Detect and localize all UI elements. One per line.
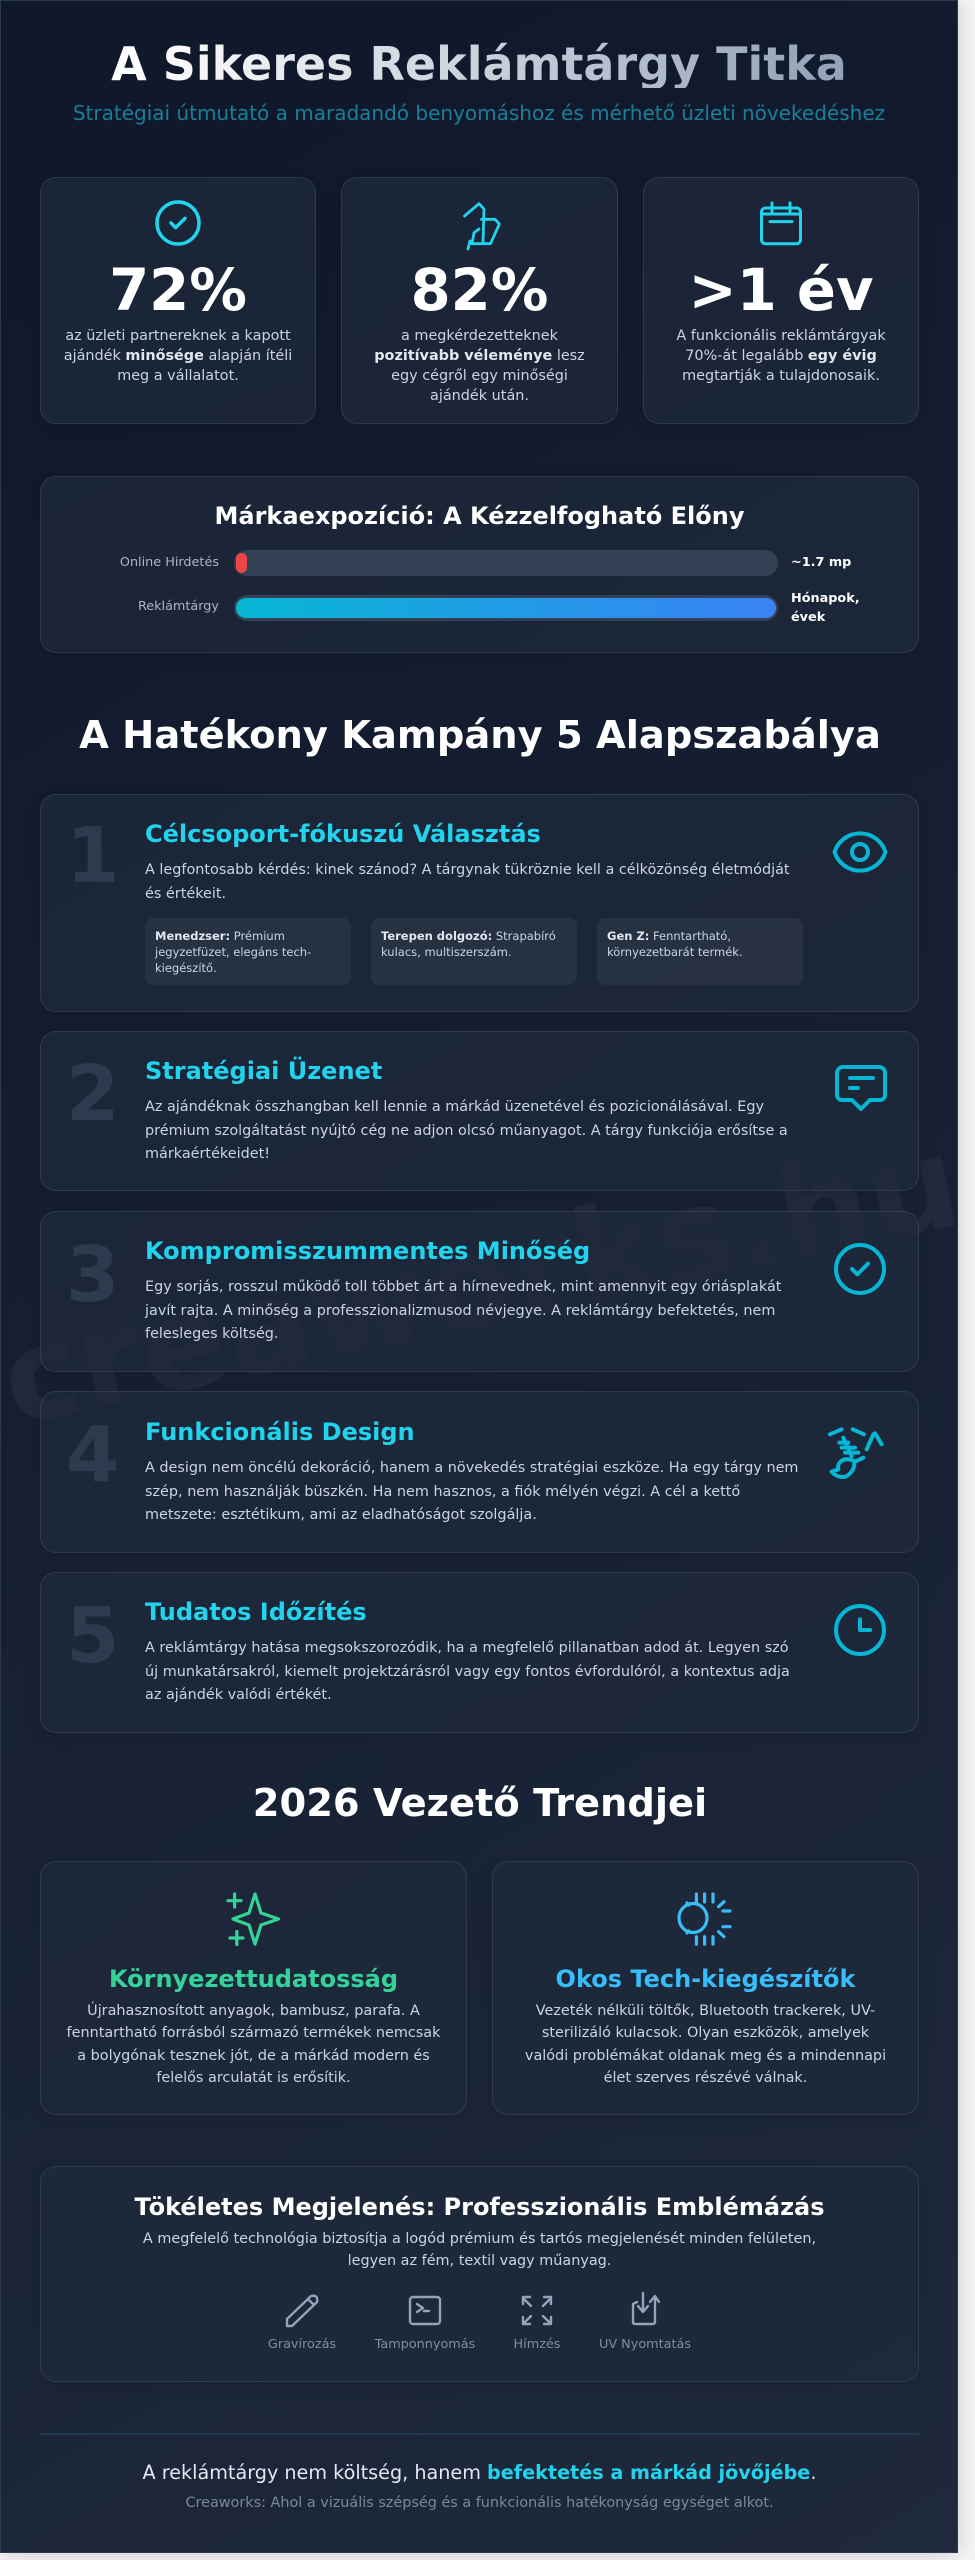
value promo item: Hónapok, bbox=[791, 591, 860, 606]
panel: stat 82% bbox=[341, 177, 618, 424]
audience: field worker: kulacs, multiszerszám. bbox=[381, 945, 512, 959]
audience: manager: kiegészítő. bbox=[155, 961, 217, 975]
bar: promo item bbox=[234, 595, 778, 621]
stat text: pozitívabb véleménye lesz bbox=[374, 348, 585, 364]
tech text: sterilizáló kulacsok. Olyan eszközök, amelyek bbox=[542, 2025, 869, 2041]
rule 1 title: Célcsoport-fókuszú Választás bbox=[145, 820, 541, 848]
rule 4 text bbox=[145, 1460, 798, 1523]
value online ad: ~1.7 mp bbox=[791, 555, 851, 570]
title: A Sikeres Reklámtárgy Titka bbox=[111, 37, 847, 91]
rule 1 text: A legfontosabb kérdés: kinek szánod? A tárgynak tükröznie kell a célközönség életmódját bbox=[145, 862, 790, 878]
label embroidery: Hímzés bbox=[514, 2337, 560, 2352]
label online ad: Online Hirdetés bbox=[120, 555, 219, 570]
rule number 3: 3 bbox=[66, 1231, 119, 1320]
icon: check circle bbox=[155, 200, 201, 246]
audience: field worker bbox=[371, 918, 577, 985]
rule 5 title: Tudatos Időzítés bbox=[145, 1598, 367, 1626]
panel: rule 2 bbox=[40, 1031, 919, 1191]
audience: gen z: Gen Z: Fenntartható, bbox=[607, 929, 731, 943]
panel: brand exposure bbox=[40, 476, 919, 652]
panel: rule 5 bbox=[40, 1572, 919, 1733]
rule number 4: 4 bbox=[66, 1411, 119, 1500]
rule 3 text: Egy sorjás, rosszul működő toll többet árt a hírnevednek, mint amennyit egy óriásplakát bbox=[145, 1279, 781, 1295]
rule 2 text: márkaértékeidet! bbox=[145, 1146, 270, 1162]
stat text: ajándék minősége alapján ítéli bbox=[64, 348, 292, 364]
stat text bbox=[374, 328, 585, 404]
value promo item: évek bbox=[791, 610, 825, 625]
audience: manager: Menedzser: Prémium bbox=[155, 929, 285, 943]
stat text: megtartják a tulajdonosaik. bbox=[682, 368, 880, 384]
panel: rule 1 bbox=[40, 794, 919, 1012]
tech text bbox=[525, 2003, 886, 2086]
rule 5 text: az ajándék valódi értékét. bbox=[145, 1687, 332, 1703]
rule 2 text: prémium szolgáltatást nyújtó cég ne adjon olcsó műanyagot. A tárgy funkciója erősítse a bbox=[145, 1122, 788, 1138]
tech text: élet szerves részévé válnak. bbox=[604, 2070, 807, 2086]
stat text bbox=[676, 328, 886, 384]
stat text: 70%-át legalább egy évig bbox=[685, 348, 877, 364]
icon: sparkles bbox=[226, 1892, 280, 1946]
branding text: A megfelelő technológia biztosítja a logód prémium és tartós megjelenését minden felületen, bbox=[143, 2231, 816, 2247]
eco title: Környezettudatosság bbox=[109, 1965, 398, 1993]
exposure heading: Márkaexpozíció: A Kézzelfogható Előny bbox=[215, 502, 744, 530]
panel: tech trend bbox=[492, 1861, 919, 2115]
rule 4 text: szép, nem használják büszkén. Ha nem hasznos, a fiók mélyén végzi. A cél a kettő bbox=[145, 1484, 740, 1500]
panel: eco trend bbox=[40, 1861, 467, 2115]
stat text bbox=[64, 328, 292, 384]
icon: calendar bbox=[760, 202, 802, 246]
eco text bbox=[66, 2002, 440, 2086]
rule 2 text: Az ajándéknak összhangban kell lennie a márkád üzenetével és pozicionálásával. Egy bbox=[145, 1099, 764, 1115]
stat text: egy cégről egy minőségi bbox=[391, 368, 568, 384]
panel: stat 72% bbox=[40, 177, 316, 424]
icon: eye bbox=[832, 831, 888, 873]
stat number 1 year: >1 év bbox=[688, 257, 874, 324]
footer main: A reklámtárgy nem költség, hanem befektetés a márkád jövőjébe. bbox=[143, 2461, 816, 2484]
rule 3 text: felesleges költség. bbox=[145, 1326, 279, 1342]
branding heading: Tökéletes Megjelenés: Professzionális Emblémázás bbox=[134, 2193, 825, 2221]
rule number 1: 1 bbox=[66, 812, 119, 901]
audience: manager: jegyzetfüzet, elegáns tech- bbox=[155, 945, 311, 959]
rule 5 text bbox=[145, 1640, 790, 1703]
stat text: A funkcionális reklámtárgyak bbox=[676, 328, 886, 344]
stat number 82%: 82% bbox=[411, 257, 548, 324]
branding text: legyen az fém, textil vagy műanyag. bbox=[348, 2253, 611, 2269]
icon: clock bbox=[834, 1604, 886, 1656]
rule 5 text: A reklámtárgy hatása megsokszorozódik, ha a megfelelő pillanatban adod át. Legyen szó bbox=[145, 1640, 789, 1656]
label engraving: Gravírozás bbox=[268, 2337, 336, 2352]
footer divider bbox=[40, 2433, 919, 2434]
audience: gen z: környezetbarát termék. bbox=[607, 945, 743, 959]
eco text: Újrahasznosított anyagok, bambusz, parafa. A bbox=[87, 2003, 420, 2019]
label pad printing: Tamponnyomás bbox=[375, 2337, 475, 2352]
rule 2 text bbox=[145, 1099, 788, 1162]
rule 3 text: javít rajta. A minőség a professzionalizmusod névjegye. A reklámtárgy befektetés, nem bbox=[145, 1302, 775, 1318]
panel: branding bbox=[40, 2166, 919, 2382]
heading: 5 rules: A Hatékony Kampány 5 Alapszabálya bbox=[79, 713, 881, 758]
rule 4 title: Funkcionális Design bbox=[145, 1418, 415, 1446]
audience: field worker: Terepen dolgozó: Strapabíró bbox=[381, 929, 556, 943]
eco text: fenntartható forrásból származó termékek nemcsak bbox=[67, 2025, 440, 2041]
watermark: creaworks.hu bbox=[0, 1107, 958, 1456]
icon: thumb up bbox=[463, 202, 501, 250]
rule 4 text: A design nem öncélú dekoráció, hanem a növekedés stratégiai eszköze. Ha egy tárgy nem bbox=[145, 1460, 798, 1476]
stat text: a megkérdezetteknek bbox=[401, 328, 558, 344]
rule 4 text: metszete: esztétikum, ami az eladhatóságot szolgálja. bbox=[145, 1507, 537, 1523]
rule number 5: 5 bbox=[66, 1592, 119, 1681]
branding text bbox=[143, 2231, 816, 2269]
icon: magic brush bbox=[828, 1427, 884, 1479]
stat number 72%: 72% bbox=[109, 257, 247, 324]
stat text: az üzleti partnereknek a kapott bbox=[65, 328, 291, 344]
icon: chip sun bbox=[677, 1892, 732, 1946]
panel: rule 3 bbox=[40, 1210, 919, 1372]
eco text: a bolygónak tesznek jót, de a márkád modern és bbox=[77, 2048, 430, 2064]
label promo item: Reklámtárgy bbox=[138, 599, 219, 614]
tech title: Okos Tech-kiegészítők bbox=[556, 1965, 855, 1993]
rule 2 title: Stratégiai Üzenet bbox=[145, 1057, 382, 1085]
rule 1 text bbox=[145, 862, 790, 902]
rule 1 text: és értékeit. bbox=[145, 886, 226, 902]
rule number 2: 2 bbox=[66, 1050, 119, 1139]
panel: rule 4 bbox=[40, 1391, 919, 1552]
icon: chat bbox=[835, 1065, 887, 1112]
tech text: Vezeték nélküli töltők, Bluetooth trackerek, UV- bbox=[536, 2003, 875, 2019]
icon: check circle bbox=[834, 1243, 886, 1295]
panel: stat 1 year bbox=[643, 177, 919, 424]
audience: manager bbox=[145, 918, 351, 985]
value promo item bbox=[791, 591, 860, 625]
footer sub: Creaworks: Ahol a vizuális szépség és a funkcionális hatékonyság egységet alkot. bbox=[185, 2495, 774, 2511]
rule 3 title: Kompromisszummentes Minőség bbox=[145, 1237, 590, 1265]
bar: online ad bbox=[234, 550, 778, 576]
stat text: meg a vállalatot. bbox=[117, 368, 239, 384]
tech text: valódi problémákat oldanak meg és a mindennapi bbox=[525, 2048, 886, 2064]
label uv print: UV Nyomtatás bbox=[599, 2337, 691, 2352]
rule 5 text: új munkatársakról, kiemelt projektzárásról vagy egy fontos évfordulóról, a kontextus adja bbox=[145, 1664, 790, 1680]
heading: trends: 2026 Vezető Trendjei bbox=[253, 1781, 707, 1826]
audience: gen z bbox=[597, 918, 803, 985]
subtitle: Stratégiai útmutató a maradandó benyomáshoz és mérhető üzleti növekedéshez bbox=[73, 101, 885, 125]
stat text: ajándék után. bbox=[430, 388, 529, 404]
eco text: felelős arculatát is erősítik. bbox=[156, 2070, 351, 2086]
rule 3 text bbox=[144, 1279, 782, 1342]
